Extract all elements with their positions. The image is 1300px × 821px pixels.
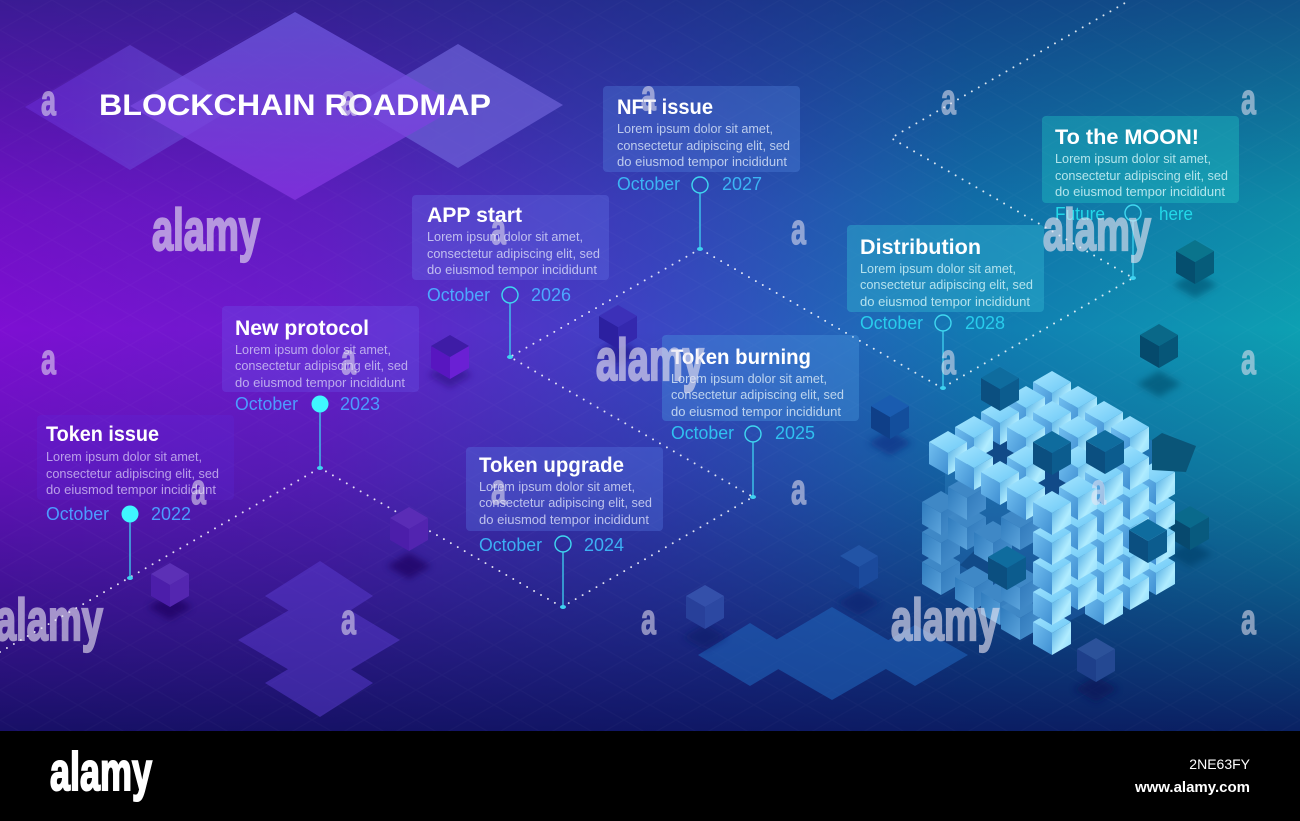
bottom right diamonds bbox=[698, 607, 968, 700]
watermarks: a bbox=[491, 465, 506, 514]
card body: do eiusmod tempor incididunt bbox=[617, 155, 788, 169]
watermarks: a bbox=[41, 76, 56, 125]
card body: consectetur adipiscing elit, sed bbox=[860, 278, 1033, 292]
card body: consectetur adipiscing elit, sed bbox=[235, 359, 408, 373]
card date: October bbox=[235, 394, 298, 414]
milestone marker bbox=[935, 315, 951, 390]
card title: Distribution bbox=[860, 236, 981, 259]
milestone marker bbox=[1125, 205, 1141, 280]
watermarks bbox=[0, 71, 1256, 653]
watermarks: a bbox=[191, 465, 206, 514]
card date: October bbox=[860, 313, 923, 333]
card body: Lorem ipsum dolor sit amet, bbox=[671, 372, 827, 386]
floating cube: purple 2 bbox=[387, 507, 431, 579]
watermarks: a bbox=[791, 465, 806, 514]
dark cube: inner back bbox=[1086, 430, 1124, 474]
card date: 2025 bbox=[775, 423, 815, 443]
card date: October bbox=[46, 504, 109, 524]
watermarks: a bbox=[1241, 335, 1256, 384]
title: BLOCKCHAIN ROADMAP bbox=[99, 89, 491, 122]
watermarks: a bbox=[341, 76, 356, 125]
card date: 2023 bbox=[340, 394, 380, 414]
card body: do eiusmod tempor incididunt bbox=[1055, 185, 1226, 199]
dotted timeline path bbox=[0, 3, 1133, 652]
website: www.alamy.com bbox=[1134, 779, 1250, 796]
watermarks: a bbox=[641, 595, 656, 644]
card date: Future bbox=[1055, 204, 1105, 224]
card body: do eiusmod tempor incididunt bbox=[860, 295, 1031, 309]
card: Token issue bbox=[37, 415, 234, 580]
milestone marker bbox=[745, 426, 761, 499]
card body: do eiusmod tempor incididunt bbox=[235, 376, 406, 390]
dark cube: tilted bbox=[1152, 433, 1196, 472]
card body: do eiusmod tempor incididunt bbox=[427, 263, 598, 277]
card title: NFT issue bbox=[617, 96, 713, 119]
floating cube: blue left bbox=[868, 395, 912, 456]
milestone marker bbox=[692, 177, 708, 251]
watermarks: a bbox=[941, 75, 956, 124]
watermarks: a bbox=[41, 335, 56, 384]
card: Token burning bbox=[662, 335, 859, 499]
footer logo: alamy bbox=[50, 742, 152, 802]
card body: Lorem ipsum dolor sit amet, bbox=[427, 230, 583, 244]
watermarks: a bbox=[1241, 595, 1256, 644]
card body: consectetur adipiscing elit, sed bbox=[479, 496, 652, 510]
floating cube: bottom navy bbox=[1074, 638, 1118, 702]
card date: 2027 bbox=[722, 174, 762, 194]
card body: consectetur adipiscing elit, sed bbox=[46, 467, 219, 481]
card date: 2028 bbox=[965, 313, 1005, 333]
floating cube: teal top bbox=[1173, 240, 1217, 298]
milestone marker bbox=[502, 287, 518, 359]
watermarks: alamy bbox=[891, 588, 999, 653]
card body: Lorem ipsum dolor sit amet, bbox=[46, 450, 202, 464]
card date: October bbox=[671, 423, 734, 443]
card body: Lorem ipsum dolor sit amet, bbox=[1055, 152, 1211, 166]
card: NFT issue bbox=[603, 86, 800, 251]
floating cube: teal behind blockchain cube bbox=[1168, 506, 1212, 567]
image id: 2NE63FY bbox=[1189, 756, 1251, 772]
watermarks: a bbox=[341, 595, 356, 644]
floating cube: teal middle bbox=[1137, 324, 1181, 397]
watermarks: a bbox=[1091, 465, 1106, 514]
card date: October bbox=[617, 174, 680, 194]
card body: consectetur adipiscing elit, sed bbox=[427, 247, 600, 261]
watermarks: a bbox=[1241, 75, 1256, 124]
footer bar bbox=[0, 731, 1300, 821]
card date: October bbox=[479, 535, 542, 555]
card: Token upgrade bbox=[466, 447, 663, 609]
card title: Token issue bbox=[46, 423, 159, 446]
floating cube: purple 3 bbox=[428, 335, 472, 388]
card: Distribution bbox=[847, 225, 1044, 390]
floating cube: blue-indigo bbox=[683, 585, 727, 650]
card body: Lorem ipsum dolor sit amet, bbox=[860, 262, 1016, 276]
card date: 2024 bbox=[584, 535, 624, 555]
watermarks: alamy bbox=[152, 198, 260, 263]
card title: New protocol bbox=[235, 317, 369, 340]
watermarks: a bbox=[491, 205, 506, 254]
card body: consectetur adipiscing elit, sed bbox=[1055, 169, 1228, 183]
card date: here bbox=[1159, 204, 1193, 224]
card title: APP start bbox=[427, 204, 522, 227]
milestone marker bbox=[122, 506, 138, 580]
dark cube: center bbox=[1033, 431, 1071, 475]
card body: do eiusmod tempor incididunt bbox=[671, 405, 842, 419]
watermarks: alamy bbox=[1043, 198, 1151, 263]
card body: Lorem ipsum dolor sit amet, bbox=[235, 343, 391, 357]
card body: consectetur adipiscing elit, sed bbox=[671, 388, 844, 402]
floating cube: purple 1 bbox=[148, 563, 192, 620]
milestone marker bbox=[555, 536, 571, 609]
card date: 2026 bbox=[531, 285, 571, 305]
large block cube bbox=[922, 367, 1196, 655]
watermarks: a bbox=[941, 335, 956, 384]
watermarks: a bbox=[791, 205, 806, 254]
dark cube: top float bbox=[981, 367, 1019, 411]
card: APP start bbox=[412, 195, 609, 359]
card date: 2022 bbox=[151, 504, 191, 524]
card body: Lorem ipsum dolor sit amet, bbox=[617, 122, 773, 136]
bottom left diamonds bbox=[238, 561, 400, 717]
watermarks: alamy bbox=[596, 328, 704, 393]
header diamonds bbox=[25, 12, 563, 200]
card body: do eiusmod tempor incididunt bbox=[479, 513, 650, 527]
cube core bbox=[945, 385, 1160, 630]
card: To the MOON bbox=[1042, 116, 1239, 280]
card title: To the MOON! bbox=[1055, 126, 1199, 149]
watermarks: a bbox=[341, 335, 356, 384]
dark cube: lower left bbox=[988, 546, 1026, 590]
floating cube: blue lower bbox=[837, 545, 881, 616]
card: New protocol bbox=[222, 306, 419, 470]
dark cube: right bbox=[1129, 519, 1167, 563]
card body: do eiusmod tempor incididunt bbox=[46, 483, 217, 497]
card date: October bbox=[427, 285, 490, 305]
card body: Lorem ipsum dolor sit amet, bbox=[479, 480, 635, 494]
card title: Token burning bbox=[671, 346, 811, 369]
card title: Token upgrade bbox=[479, 454, 624, 477]
watermarks: a bbox=[641, 71, 656, 120]
card body: consectetur adipiscing elit, sed bbox=[617, 139, 790, 153]
milestone marker bbox=[312, 396, 328, 470]
floating cube: indigo bbox=[596, 305, 640, 366]
